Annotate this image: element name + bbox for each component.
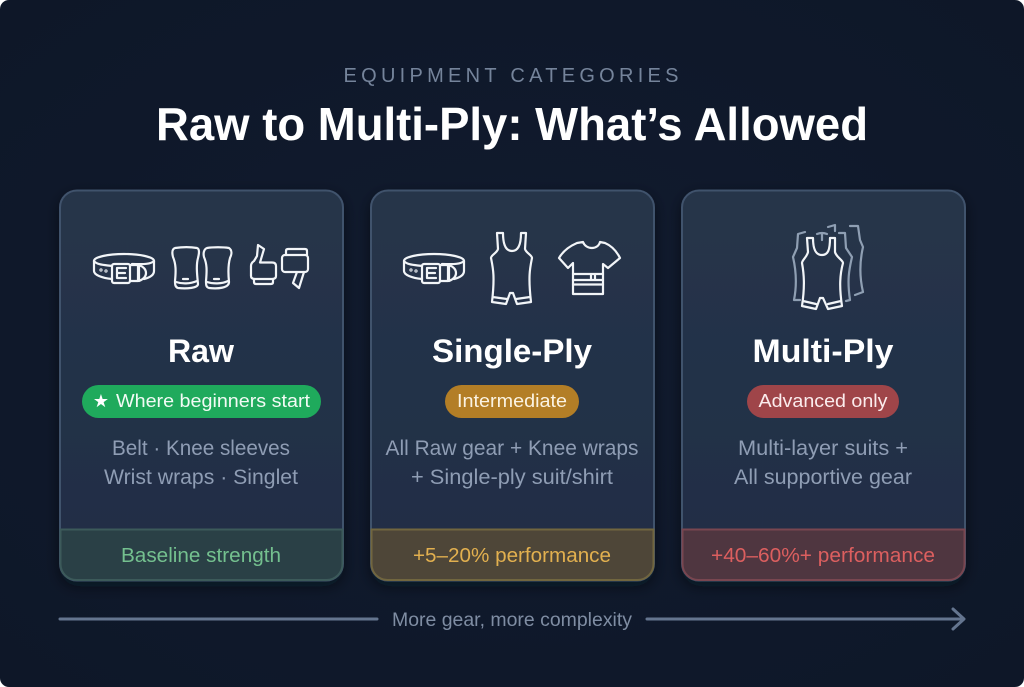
- icon: belt: [404, 254, 464, 283]
- description: Single-Ply: + Single-ply suit/shirt: [411, 466, 613, 489]
- description: Multi-Ply: Multi-layer suits +: [738, 437, 908, 460]
- badge: where beginners start: [82, 385, 321, 418]
- description: Multi-Ply: [734, 437, 912, 489]
- badge: intermediate: Intermediate: [457, 391, 567, 411]
- eyebrow label: EQUIPMENT CATEGORIES: [344, 65, 678, 87]
- footer: +5–20% performance: +5–20% performance: [413, 545, 611, 567]
- footer: baseline strength: Baseline strength: [121, 545, 281, 567]
- description: Raw: Wrist wraps · Singlet: [104, 466, 298, 489]
- icon: knee sleeves: [172, 247, 231, 288]
- panel: Single-Ply: [371, 190, 654, 580]
- description: Multi-Ply: All supportive gear: [734, 466, 912, 489]
- description: Single-Ply: All Raw gear + Knee wraps: [386, 437, 638, 460]
- heading: Single-Ply: Single-Ply: [432, 333, 592, 369]
- footer: +5–20% performance: [372, 530, 654, 580]
- icon: shirt with belt: [559, 242, 620, 294]
- icon: belt: [94, 254, 154, 283]
- progression arrow: [60, 609, 964, 631]
- panel: Raw: [60, 190, 343, 580]
- heading: Multi-Ply: Multi-Ply: [752, 333, 894, 369]
- badge: where beginners start: Where beginners start: [116, 391, 310, 411]
- badge: intermediate: [445, 385, 579, 418]
- icon: singlet: [491, 233, 532, 304]
- description: Single-Ply: [386, 437, 638, 489]
- title: Raw to Multi-Ply: What’s Allowed: [156, 98, 868, 150]
- icon: layered suits: [793, 225, 863, 309]
- icon: wrist wraps: [251, 245, 308, 288]
- description: Raw: Belt · Knee sleeves: [112, 437, 290, 460]
- heading: Raw: Raw: [168, 333, 234, 369]
- panel: Multi-Ply: [682, 190, 965, 580]
- footer: +40–60%+ performance: +40–60%+ performance: [711, 545, 935, 567]
- icon: star: ★: [93, 391, 109, 412]
- footer: baseline strength: [60, 530, 342, 580]
- arrow label: More gear, more complexity: [392, 609, 632, 631]
- badge: advanced only: [747, 385, 899, 418]
- footer: +40–60%+ performance: [682, 530, 964, 580]
- description: Raw: [104, 437, 298, 489]
- badge: advanced only: Advanced only: [758, 391, 888, 411]
